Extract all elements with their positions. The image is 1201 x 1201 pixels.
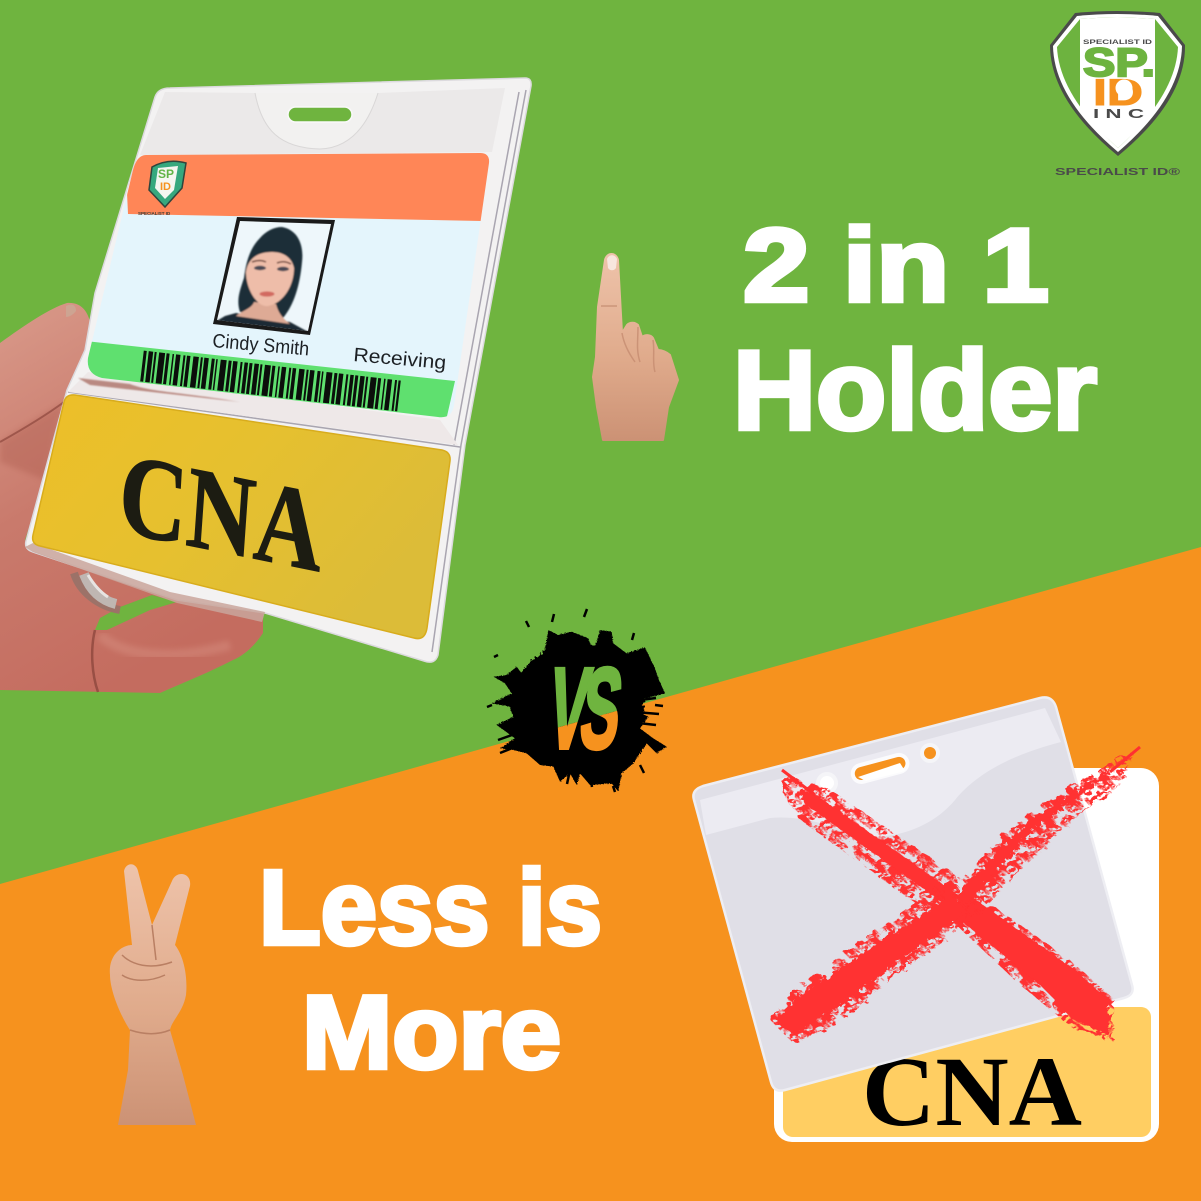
gap between fingers (95, 595, 177, 630)
holder body (26, 78, 531, 662)
card name text: Cindy Smith (212, 330, 310, 360)
logo INC: I N C (1093, 106, 1145, 121)
X stroke top-left to bottom-right (782, 770, 1115, 1040)
card logo small shield: SPECIALIST ID (138, 211, 171, 216)
red X cross-out mark (770, 747, 1140, 1045)
holder left hole (818, 774, 836, 792)
lower clear pocket strip (25, 543, 265, 622)
heading: 2 in 1: 2 in 1 (743, 208, 1049, 324)
icon: one finger hand (593, 254, 678, 440)
heading: Less is: Less is (259, 849, 602, 967)
logo small wordmark: SPECIALIST ID (1083, 39, 1152, 46)
heading: More: More (302, 975, 561, 1091)
heading: Holder: Holder (733, 328, 1097, 453)
holder slot (851, 753, 909, 784)
yellow CNA strip (783, 1007, 1151, 1137)
card portrait photo (213, 217, 335, 335)
hand holding the badge holder (0, 303, 263, 693)
VS ink splat badge (487, 609, 667, 792)
logo head icon (1116, 80, 1132, 96)
wedding ring (74, 573, 120, 610)
X stroke top-right to bottom-left (770, 747, 1140, 1045)
ink splat (487, 609, 667, 792)
VS lettering: VS (542, 645, 627, 773)
holder top flap (700, 708, 1061, 837)
logo caption: SPECIALIST ID® (1055, 166, 1180, 178)
card department text: Receiving (353, 344, 447, 374)
background: orange lower diagonal panel (0, 547, 1201, 1201)
logo SP mark: SP. (1083, 41, 1155, 85)
CNA text: CNA (862, 1036, 1082, 1147)
white badge behind the holder (774, 768, 1159, 1147)
VS lettering: VS (542, 645, 627, 773)
card logo small shield: SP (158, 167, 174, 181)
card orange band (125, 150, 495, 221)
card logo small shield (138, 161, 186, 216)
card logo small shield: ID (160, 181, 171, 193)
yellow CNA badge buddy: CNA (115, 429, 327, 597)
icon: two fingers hand (110, 864, 196, 1125)
logo ID mark: ID (1093, 72, 1143, 113)
ID card (80, 145, 500, 425)
holder right hole (922, 745, 938, 761)
badge holder: clear 2 in 1 vinyl (25, 78, 531, 662)
card green band (88, 342, 455, 418)
yellow CNA badge buddy (33, 395, 450, 639)
holder top tab with slot (140, 88, 505, 155)
strip between card and tag (68, 372, 458, 445)
clear horizontal badge holder (693, 697, 1133, 1091)
barcode (142, 366, 399, 396)
logo: Specialist ID shield (1050, 11, 1185, 178)
VS lettering (554, 666, 622, 752)
